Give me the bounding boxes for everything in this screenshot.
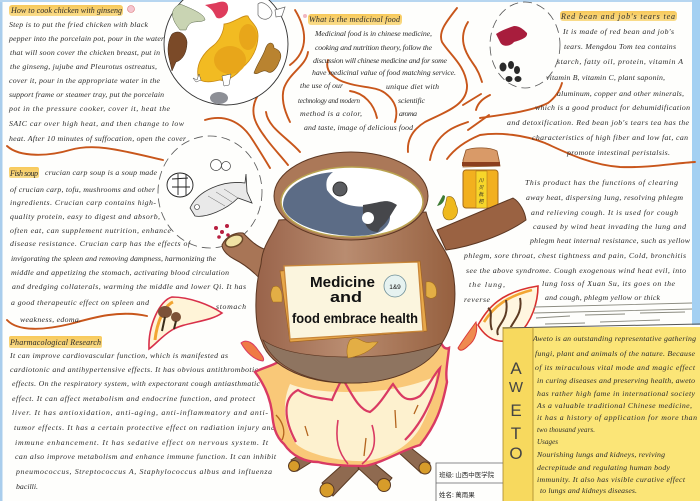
small flames right (458, 322, 477, 350)
icon: chicken (193, 16, 258, 86)
aweto text: it has a history of application for more than (537, 413, 697, 422)
aweto text: decrepitude and regulating human body (537, 463, 671, 472)
plaque: food embrace health (292, 310, 418, 326)
plaque: and (330, 289, 362, 306)
aweto vertical title (509, 359, 524, 463)
text block: fish soup: weakness, edoma. (20, 315, 81, 324)
aweto text: in curing diseases and preserving health, aweto (537, 376, 695, 385)
text block: pharmacological research: It can improve cardiovascular function, which is manifested as (9, 351, 228, 360)
icon: mushroom (210, 92, 228, 104)
illustration: honey jar: 枇 (478, 191, 484, 198)
text block: medicinal food: Medicinal food is in chinese medicine, (314, 29, 432, 38)
icon: ginger (254, 43, 281, 74)
icon: ginseng root (168, 4, 205, 71)
text block: chicken recipe: pepper into the porcelain pot, pour in the water (8, 34, 165, 43)
pot spout (222, 233, 290, 290)
text block: product functions: and relieving cough. It is used for cough (531, 208, 678, 217)
text block: pharmacological research: liver. It has antioxidation, anti-aging, anti-inflammatory and anti- (12, 408, 268, 417)
panel: aweto (503, 324, 700, 501)
text block: chicken recipe: cover it, pour in the appropriate water in the (9, 76, 161, 85)
text block: red bean tea: characteristics of high fiber and low fat, can (532, 133, 688, 142)
text block: red bean tea: vitamin B, vitamin C, plant saponin, (546, 73, 665, 82)
aweto vertical title: W (509, 379, 524, 396)
heading: how to cook chicken with ginseng: How to cook chicken with ginseng (10, 6, 122, 15)
text block: fish soup: ingredients. Crucian carp contains high- (10, 198, 156, 207)
text block: pharmacological research (9, 351, 277, 491)
text block: pharmacological research: bacilli. (16, 482, 38, 491)
text block: fish soup: middle and appetizing the stomach, activating blood circulation (11, 268, 229, 277)
aweto text (532, 334, 697, 495)
text block: product functions: phlegm heat internal resistance, such as yellow (529, 236, 691, 245)
text block: red bean tea: starch, fatty oil, protein, vitamin A (557, 57, 683, 66)
aweto text: two thousand years. (537, 426, 595, 434)
text block: chicken recipe (8, 20, 187, 143)
text block: fish soup: and dredging collaterals, warming the middle and lower Qi. It has (12, 282, 246, 291)
text block: fish soup: invigorating the spleen and removing dampness, harmonizing the (11, 254, 217, 263)
aweto text: immunity. It also has visible curative effect (537, 475, 686, 484)
illustration: honey jar (462, 148, 500, 208)
aweto vertical title: E (510, 401, 522, 420)
text block: pharmacological research: cardiotonic and antihypertensive effects. It has obvious antithrombotic (10, 365, 259, 374)
text block: pharmacological research: effect. It can affect metabolism and endocrine function, and protect (12, 394, 256, 403)
sketch lines above aweto box (534, 303, 692, 324)
aweto text: has rather high fame in international society (537, 389, 696, 398)
icon: pear (437, 195, 458, 220)
aweto vertical title: O (509, 444, 523, 463)
small flame left (241, 341, 264, 361)
text block: product functions: see the above syndrome. Cough exogenous wind heat evil, into (466, 266, 686, 275)
text block: product functions: phlegm, sore throat, chest tightness and pain, Cold, bronchitis (463, 251, 686, 260)
plaque: 1&9 (389, 284, 401, 291)
text block: red bean tea: aluminum, copper and other minerals, (557, 89, 684, 98)
text block: chicken recipe: Step is to put the fried chicken with black (9, 20, 149, 29)
text block: red bean tea: which is a good product for dehumidification (535, 103, 690, 112)
text block: chicken recipe: pot in the pressure cooker, cover it, heat the (8, 104, 171, 113)
heading: fish soup: Fish soup (9, 169, 38, 178)
text block: medicinal food: scientific (398, 96, 426, 105)
text block: fish soup: stomach (216, 302, 246, 311)
illustration: honey jar: 川 (478, 178, 484, 184)
aweto text: Usages (537, 438, 558, 446)
aweto text: to lungs and kidneys diseases. (540, 486, 637, 495)
text block: pharmacological research: can also improve metabolism and enhance immune function. It can inhibit (15, 452, 277, 461)
icon: red berries (214, 224, 230, 239)
aweto text: of its miraculous vital mode and magic effect (535, 363, 696, 372)
illustration: honey jar: 贝 (478, 185, 484, 191)
illustration: red bean and job's tears circle (490, 2, 560, 88)
illustration: logs (288, 444, 431, 497)
pot handle (437, 198, 526, 250)
text block: red bean tea: promote intestinal peristalsis. (566, 148, 670, 157)
pot body (256, 212, 455, 383)
text block: medicinal food: unique diet with (386, 82, 439, 91)
text block: pharmacological research: tumor effects. It has a certain protective effect on radiation injury and (14, 423, 275, 432)
text block: red bean tea: tears. Mengdou Tom tea contains (564, 42, 676, 51)
text block: fish soup: quality protein, easy to digest and absorb, (10, 212, 160, 221)
text block: medicinal food: aroma (399, 109, 417, 118)
decorative flowing lines (7, 8, 695, 329)
text block: fish soup: disease resistance. Crucian carp has the effects of (10, 239, 192, 248)
text block: medicinal food: have medicinal value of food matching service. (312, 68, 456, 77)
clouds ornaments (271, 282, 437, 358)
text block: chicken recipe: heat. After 10 minutes of suffocation, open the cover (9, 134, 187, 143)
text block: chicken recipe: that will soon cover the chicken breast, put in (10, 48, 160, 57)
text block: chicken recipe: the ginseng, jujube and Pleurotus ostreatus, (10, 62, 157, 71)
aweto text: Nourishing lungs and kidneys, reviving (536, 450, 665, 459)
icon: garlic (258, 3, 285, 19)
heading: pharmacological research: Pharmacological Research (9, 338, 101, 347)
text block: fish soup: crucian carp soup is a soup made (45, 168, 158, 177)
text block: product functions: lung loss of Xuan Su, its goes on the (542, 279, 676, 288)
icon: mushrooms (210, 160, 230, 170)
text block: medicinal food: technology and modern (298, 97, 360, 105)
text block: fish soup: a good therapeutic effect on spleen and (11, 298, 149, 307)
plaque: Medicine (310, 274, 375, 291)
icon: strawberry (205, 2, 228, 18)
text block: chicken recipe: SAIC car over high heat, and then change to low (9, 119, 185, 128)
pot rim (274, 152, 428, 240)
name table (436, 463, 503, 501)
illustration: fish and tofu circle (158, 136, 262, 248)
icon: tofu (167, 173, 193, 197)
text block: fish soup: often eat, can supplement nutrition, enhance (10, 226, 172, 235)
text block: product functions: away heat, dispersing lung, resolving phlegm (526, 193, 683, 202)
text block: pharmacological research: pneumococcus, Streptococcus A, Staphylococcus albus and influenza (15, 467, 272, 476)
plaque (280, 261, 427, 342)
aweto text: fungi, plant and animals of the nature. Because (535, 349, 696, 358)
pot opening with yin yang (281, 167, 423, 237)
text block: medicinal food: method is a color, (300, 109, 362, 118)
heading: what is the medicinal food: What is the medicinal food (309, 15, 401, 24)
text block: product functions: the lung, (469, 280, 505, 289)
text block: red bean tea: It is made of red bean and job's (562, 27, 674, 36)
text block: product functions: and cough, phlegm yellow or thick (545, 293, 661, 302)
illustration: honey jar: 杷 (478, 198, 484, 205)
heading: red bean and job's tears tea: Red bean and job's tears tea (560, 12, 675, 21)
text block: product functions: This product has the functions of clearing (525, 178, 678, 187)
illustration: medicine pot (222, 152, 526, 383)
text block: product functions (463, 178, 691, 304)
icon: red beans (496, 26, 527, 46)
name table: 姓名: 萬雨果 (439, 489, 475, 499)
text block: product functions: caused by wind heat invading the lung and (533, 222, 686, 231)
aweto text: As a valuable traditional Chinese medicine, (536, 401, 692, 410)
name table: 班级: 山西中医学院 (439, 469, 495, 479)
text block: product functions: reverse (464, 295, 491, 304)
icon: fish (190, 174, 252, 216)
text block: medicinal food (298, 29, 456, 132)
text block: red bean tea (507, 27, 690, 157)
text block: pharmacological research: immune enhancement. It has sedative effect on nervous system. It (15, 438, 269, 447)
text block: medicinal food: and taste, image of delicious food (304, 123, 413, 132)
aweto vertical title: T (511, 424, 521, 443)
illustration: fire (255, 340, 449, 466)
text block: medicinal food: discussion will chinese medicine and for some (313, 56, 448, 65)
text block: pharmacological research: effects. On the respiratory system, with expectorant cough antiasthmatic (12, 379, 261, 388)
text block: red bean tea: and detoxification. Red bean job's tears tea has the (507, 118, 690, 127)
text block: fish soup: of crucian carp, tofu, mushrooms and other (10, 185, 156, 194)
aweto text: Aweto is an outstanding representative gathering (532, 334, 696, 343)
illustration: liver with mushroom (149, 297, 222, 349)
text block: medicinal food: the use of our (300, 81, 344, 90)
illustration: lung leaf (478, 286, 538, 341)
text block: medicinal food: cooking and nutrition theory, follow the (315, 43, 433, 52)
text block: chicken recipe: support frame or steamer tray, put the porcelain (9, 90, 164, 99)
aweto vertical title: A (510, 359, 522, 378)
text block: fish soup (10, 168, 246, 324)
icon: job's tears (500, 61, 522, 82)
illustration: chicken and ingredients circle (164, 0, 288, 105)
